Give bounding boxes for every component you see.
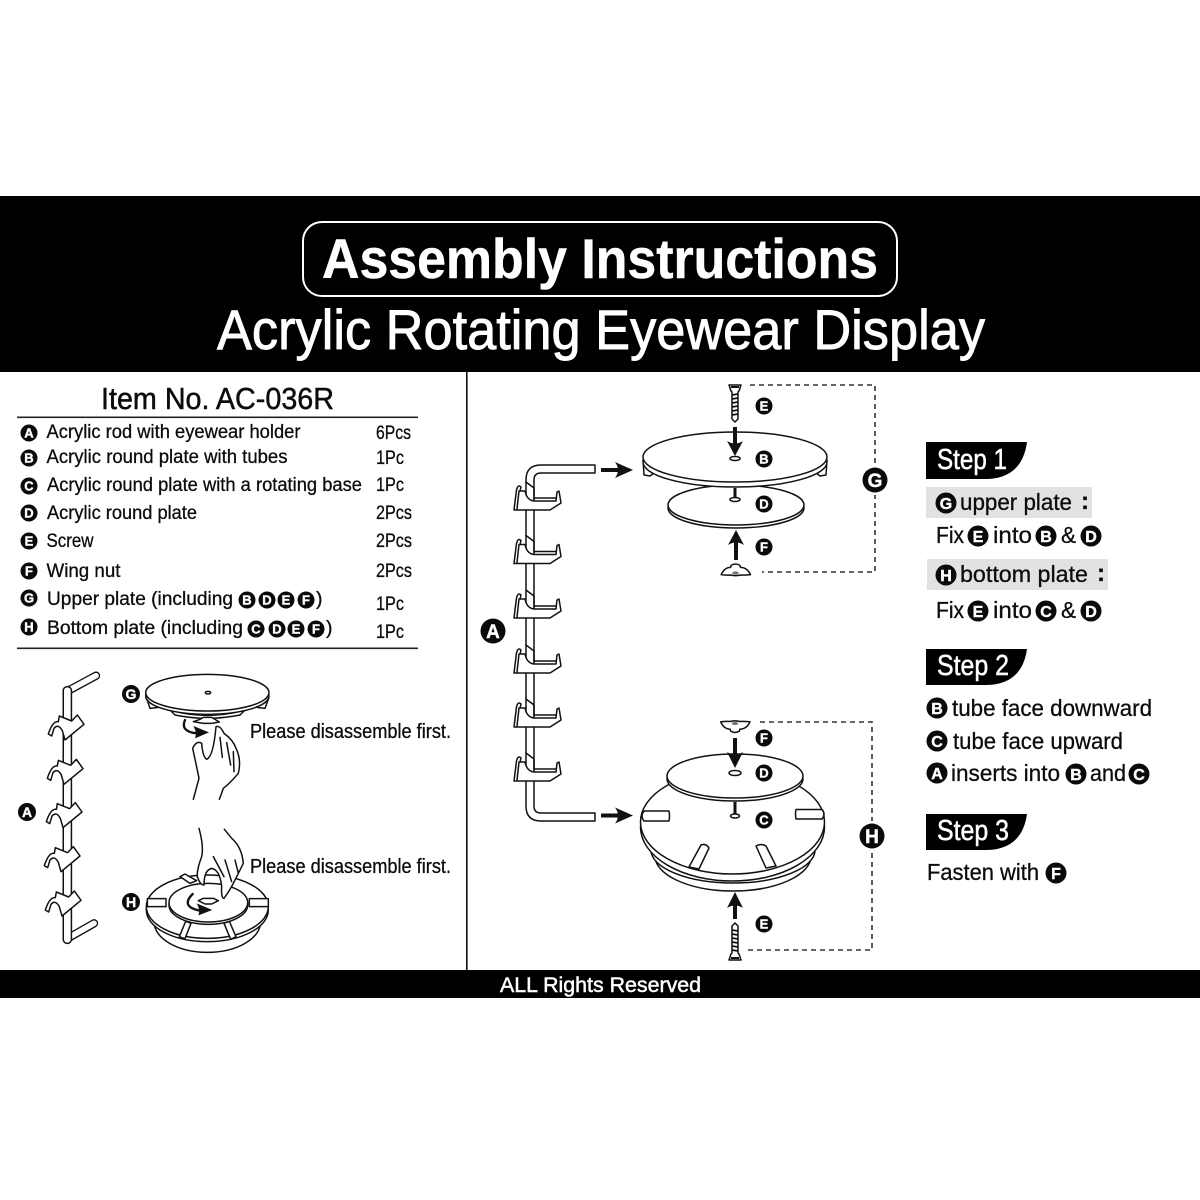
bottom plate label: H	[940, 568, 952, 585]
fix line 2: E	[973, 604, 984, 621]
fix line 2: Fix	[936, 597, 964, 623]
tube lower left	[689, 844, 709, 869]
plate D lower	[667, 754, 803, 801]
header band	[0, 196, 1200, 372]
plate B	[643, 432, 827, 487]
badge G large	[860, 465, 890, 495]
row A: 6Pcs	[376, 422, 411, 444]
row B: B	[24, 451, 34, 466]
wing nut lower	[721, 721, 750, 732]
row H	[20, 617, 404, 643]
row A	[20, 421, 411, 444]
tube left	[642, 811, 670, 821]
badge F lower: F	[760, 731, 768, 746]
plate D upper	[668, 485, 804, 528]
row A: Acrylic rod with eyewear holder	[46, 421, 301, 443]
badge E upper: E	[760, 399, 769, 414]
upper dashed bracket	[750, 385, 875, 572]
row H: 1Pc	[376, 621, 404, 643]
fix line 1: &	[1061, 522, 1076, 548]
fix line 2: D	[1085, 604, 1097, 621]
screw upper	[729, 385, 741, 422]
row E: E	[25, 534, 34, 549]
wing nut upper	[721, 564, 750, 576]
row D: 2Pcs	[376, 502, 412, 524]
badge D lower: D	[759, 766, 769, 781]
row G: G	[24, 591, 34, 606]
item number heading: Item No. AC-036R	[101, 381, 334, 416]
badge B	[756, 450, 772, 468]
panel: steps	[926, 442, 1152, 885]
plate C with rotating base	[640, 770, 824, 891]
row A: A	[24, 426, 34, 441]
badge D upper	[756, 496, 772, 512]
badge H small: H	[126, 894, 136, 910]
badge B: B	[759, 452, 769, 467]
holder 2	[514, 536, 561, 564]
row E	[20, 530, 412, 552]
row H: )	[326, 617, 332, 639]
step 2 line A: inserts into	[951, 760, 1060, 786]
step 2 line A	[926, 760, 1150, 786]
step 3 heading: Step 3	[937, 815, 1009, 847]
badge F lower	[756, 730, 772, 746]
row F: Wing nut	[46, 560, 121, 582]
badge G small	[122, 685, 140, 703]
row G: )	[316, 588, 322, 610]
badge H large	[857, 821, 887, 851]
caption 1: Please disassemble first.	[250, 721, 451, 743]
arrow: rod to lower plate	[601, 808, 633, 824]
rod A large	[526, 465, 595, 821]
step 2 line B: B	[931, 701, 943, 718]
row D	[20, 502, 412, 524]
badge E upper	[756, 398, 772, 414]
step 2 line A: B	[1070, 767, 1082, 784]
row F: F	[25, 564, 33, 579]
fix line 1: into	[993, 522, 1032, 548]
row G: Upper plate (including	[47, 588, 233, 610]
row G	[20, 588, 404, 615]
row C: C	[24, 479, 34, 494]
holder 1	[514, 482, 561, 510]
badge D upper: D	[759, 497, 769, 512]
step 2 line C: C	[931, 734, 943, 751]
row D: D	[24, 506, 34, 521]
fix line 2: &	[1061, 597, 1076, 623]
panel: parts list	[17, 381, 418, 649]
badge A small: A	[22, 804, 32, 820]
badge C: C	[759, 813, 769, 828]
row B: Acrylic round plate with tubes	[46, 446, 288, 468]
bottom plate with hand	[146, 828, 268, 952]
row F	[20, 560, 412, 582]
row G: F	[302, 593, 310, 608]
fix line 1: E	[973, 529, 984, 546]
panel: disassembly illustrations	[18, 674, 451, 952]
holder 4	[514, 645, 561, 673]
badge D lower	[756, 764, 772, 782]
arrow into plate B	[727, 427, 743, 456]
row H: D	[272, 622, 282, 637]
fix line 1: Fix	[936, 522, 964, 548]
bottom plate label: bottom plate	[960, 561, 1088, 587]
header band: Acrylic Rotating Eyewear Display	[217, 298, 985, 361]
badge A large: A	[486, 622, 500, 643]
badge G large: G	[868, 471, 882, 492]
row C: 1Pc	[376, 474, 404, 496]
row G: E	[282, 593, 291, 608]
badge H small	[122, 893, 140, 911]
holder 5	[514, 699, 561, 727]
step 2 line B: tube face downward	[952, 695, 1152, 721]
badge F upper: F	[760, 540, 768, 555]
step 2 line A: A	[931, 766, 943, 783]
upper plate label: :	[1081, 488, 1089, 515]
row C: Acrylic round plate with a rotating base	[47, 474, 362, 496]
badge G small: G	[126, 686, 137, 702]
row E: Screw	[46, 530, 94, 552]
step 2 line A: C	[1133, 767, 1145, 784]
tube lower right	[756, 844, 776, 868]
row H: E	[292, 622, 301, 637]
step 1 heading: Step 1	[937, 444, 1007, 476]
arrow into plate D	[727, 738, 743, 768]
row H: C	[251, 622, 261, 637]
row D: Acrylic round plate	[47, 502, 197, 524]
step 2 heading: Step 2	[937, 650, 1009, 682]
row G: B	[242, 593, 252, 608]
footer band	[0, 970, 1200, 998]
bottom plate label: :	[1097, 560, 1105, 587]
badge H large: H	[865, 827, 879, 848]
upper plate label: upper plate	[960, 489, 1072, 515]
fix line 1: D	[1085, 529, 1097, 546]
row H: F	[312, 622, 320, 637]
row B	[20, 446, 404, 469]
row G: 1Pc	[376, 593, 404, 615]
bottom plate label	[927, 559, 1108, 590]
screw lower	[729, 923, 741, 960]
upper plate label	[926, 487, 1092, 518]
badge E lower	[756, 916, 772, 932]
badge A large	[480, 618, 506, 644]
footer band: ALL Rights Reserved	[500, 974, 701, 997]
badge C	[756, 812, 772, 828]
step 3 line: Fasten with	[927, 859, 1039, 885]
step 2 line A: and	[1090, 760, 1126, 786]
badge A small	[18, 803, 36, 821]
arrow up to plate D	[728, 530, 744, 560]
rod A small	[44, 676, 96, 939]
panel: exploded assembly diagram	[480, 385, 890, 960]
holder 6	[514, 753, 561, 781]
upper plate with hand	[146, 674, 269, 799]
badge E lower: E	[760, 917, 769, 932]
row H: Bottom plate (including	[47, 617, 243, 639]
vertical divider	[466, 372, 468, 970]
upper plate label: G	[940, 496, 952, 513]
row B: 1Pc	[376, 447, 404, 469]
row F: 2Pcs	[376, 560, 412, 582]
row E: 2Pcs	[376, 530, 412, 552]
fix line 1: B	[1040, 529, 1052, 546]
arrow up into plate C	[727, 892, 743, 919]
fix line 2	[936, 597, 1102, 623]
arrow: rod to upper plate	[601, 462, 633, 478]
holder 3	[514, 590, 561, 618]
fix line 2: into	[993, 597, 1032, 623]
step 2 line C: tube face upward	[953, 728, 1123, 754]
fix line 2: C	[1040, 604, 1052, 621]
row H: H	[24, 620, 34, 635]
badge F upper	[756, 538, 772, 556]
tube right	[796, 810, 824, 819]
step 3 line: F	[1051, 866, 1061, 883]
row G: D	[262, 593, 272, 608]
caption 2: Please disassemble first.	[250, 856, 451, 878]
fix line 1	[936, 522, 1102, 548]
lower dashed bracket	[748, 722, 872, 950]
title box: Assembly Instructions	[322, 227, 878, 290]
